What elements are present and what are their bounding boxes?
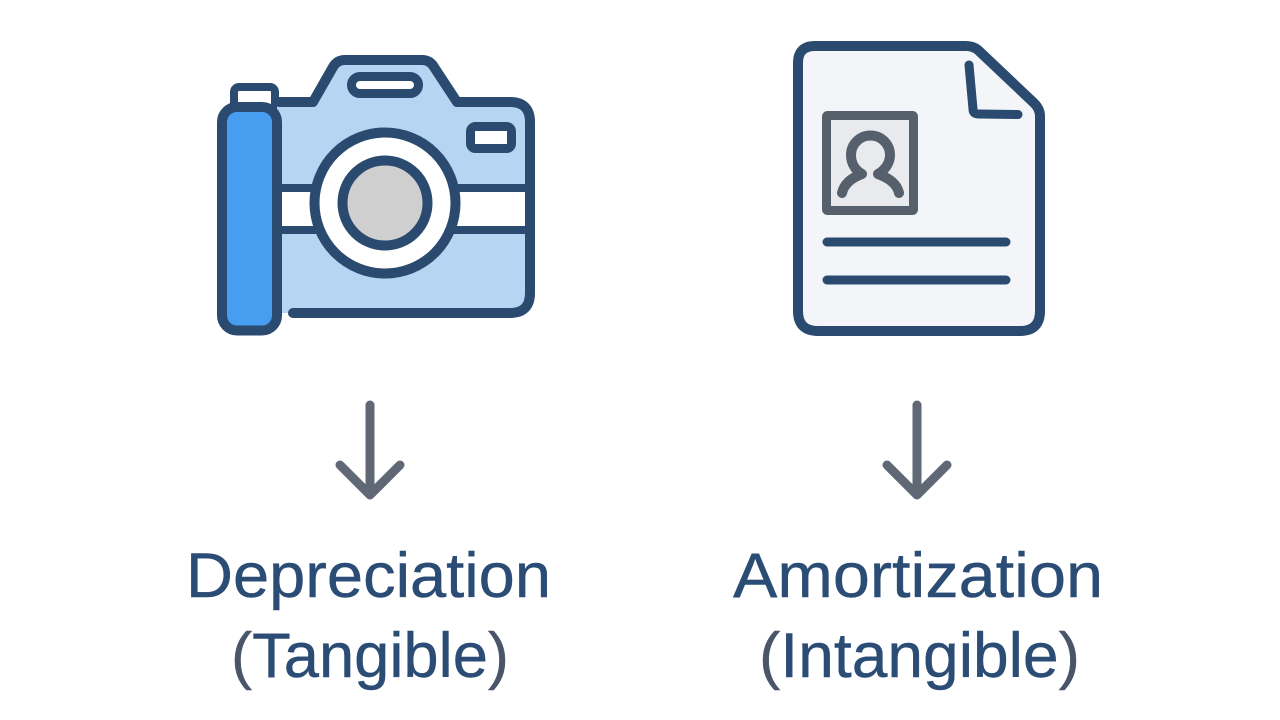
camera body outline	[279, 60, 530, 313]
person silhouette	[842, 136, 899, 193]
camera blue grip	[222, 107, 277, 330]
arrow: document to amortization	[887, 405, 947, 495]
document text lines	[827, 242, 1006, 280]
icon: camera	[222, 60, 530, 330]
camera lens ring	[314, 132, 456, 274]
label: amortization: Amortization	[733, 541, 1103, 611]
camera lens glass	[342, 160, 428, 246]
label: intangible: (Intangible)	[759, 621, 1080, 691]
camera viewfinder	[352, 76, 418, 94]
camera top button	[234, 87, 275, 109]
camera body fill	[277, 60, 530, 313]
document corner fold	[969, 65, 1018, 114]
camera flash window	[470, 126, 512, 148]
arrow: camera to depreciation	[340, 405, 400, 495]
icon: document	[798, 46, 1040, 331]
camera white band	[278, 188, 528, 230]
label: depreciation: Depreciation	[186, 541, 551, 611]
portrait photo	[826, 116, 914, 210]
label: tangible: (Tangible)	[231, 621, 509, 691]
document sheet	[798, 46, 1040, 331]
